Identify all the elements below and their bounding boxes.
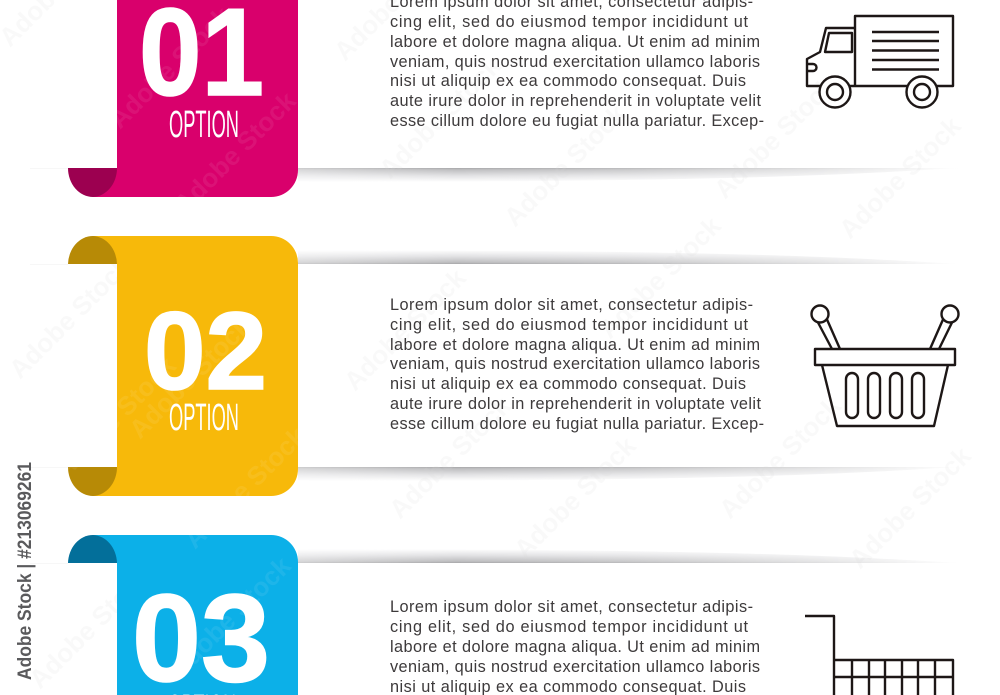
shadow bands behind the ribbons (298, 168, 960, 563)
watermark pattern: Adobe Stock (833, 110, 967, 244)
watermark over ribbons: Adobe Stock (103, 0, 237, 134)
watermark pattern: Adobe Stock (708, 70, 842, 204)
ribbon body 01 (93, 0, 298, 197)
text block 1: veniam, quis nostrud exercitation ullamco laboris (390, 53, 760, 71)
text block 3: labore et dolore magna aliqua. Ut enim ad minim (390, 638, 760, 656)
text block 1: esse cillum dolore eu fugiat nulla pariatur. Excep- (390, 112, 764, 130)
ribbon top fold 02 (68, 236, 117, 264)
ribbon body 03 (93, 535, 298, 695)
stock credit: Adobe Stock | #213069261 (15, 462, 36, 680)
text block 2: veniam, quis nostrud exercitation ullamco laboris (390, 355, 760, 373)
text block 2 (390, 296, 764, 433)
text block 3: veniam, quis nostrud exercitation ullamco laboris (390, 658, 760, 676)
watermark pattern: Adobe Stock (508, 430, 642, 564)
text block 2: labore et dolore magna aliqua. Ut enim ad minim (390, 336, 760, 354)
ribbon bottom fold 02 (68, 467, 117, 496)
icon: shopping cart (805, 616, 953, 695)
panel: option 03 ribbon (68, 535, 298, 695)
panel: option 02 ribbon: OPTION (169, 397, 239, 439)
text block 1: labore et dolore magna aliqua. Ut enim ad minim (390, 33, 760, 51)
shadow band 3 (298, 467, 960, 481)
watermark pattern: Adobe Stock (383, 390, 517, 524)
ribbon fold 01 (68, 168, 117, 197)
watermark over ribbons: Adobe Stock (168, 85, 302, 219)
text block 1: cing elit, sed do eiusmod tempor incididunt ut (390, 13, 748, 31)
watermark pattern: Adobe Stock (373, 50, 507, 184)
shadow band 1 (298, 168, 960, 182)
watermark over ribbons: Adobe Stock (48, 350, 182, 484)
text block 1: aute irure dolor in reprehenderit in voluptate velit (390, 92, 761, 110)
watermark over ribbons: Adobe Stock (178, 420, 312, 554)
text block 2: aute irure dolor in reprehenderit in voluptate velit (390, 395, 761, 413)
panel: option 02 ribbon (68, 236, 298, 496)
panel: option 01 ribbon (68, 0, 298, 197)
text block 2: cing elit, sed do eiusmod tempor incididunt ut (390, 316, 748, 334)
watermark pattern: Adobe Stock (713, 390, 847, 524)
number 02: 02 (144, 290, 267, 413)
text block 2: nisi ut aliquip ex ea commodo consequat. Duis (390, 375, 746, 393)
shadow band 2 (298, 250, 960, 264)
text block 1 (390, 0, 764, 130)
panel: option 01 ribbon: OPTION (169, 104, 239, 146)
text block 2: Lorem ipsum dolor sit amet, consectetur adipis- (390, 296, 753, 314)
watermark pattern: Adobe Stock (23, 560, 157, 694)
faint shadow lines left of the ribbons (30, 168, 68, 564)
watermark over ribbons: Adobe Stock (123, 310, 257, 444)
ribbon top fold 03 (68, 535, 117, 563)
watermark pattern: Adobe Stock (498, 98, 632, 232)
watermark pattern: Adobe Stock (3, 250, 137, 384)
text block 2: esse cillum dolore eu fugiat nulla pariatur. Excep- (390, 415, 764, 433)
ribbon body 02 (93, 236, 298, 496)
shadow band 4 (298, 549, 960, 563)
icon: shopping basket (812, 306, 958, 426)
watermark pattern: Adobe Stock (593, 210, 727, 344)
watermark over ribbons: Adobe Stock (163, 550, 297, 684)
text block 3: cing elit, sed do eiusmod tempor incididunt ut (390, 618, 748, 636)
watermark pattern: Adobe Stock (338, 262, 472, 396)
icon: delivery truck (807, 16, 953, 108)
text block 3 (390, 598, 760, 695)
watermark over ribbons (48, 0, 312, 684)
text block 1: nisi ut aliquip ex ea commodo consequat. Duis (390, 72, 746, 90)
watermark pattern: Adobe Stock (843, 440, 977, 574)
text block 3: Lorem ipsum dolor sit amet, consectetur adipis- (390, 598, 753, 616)
